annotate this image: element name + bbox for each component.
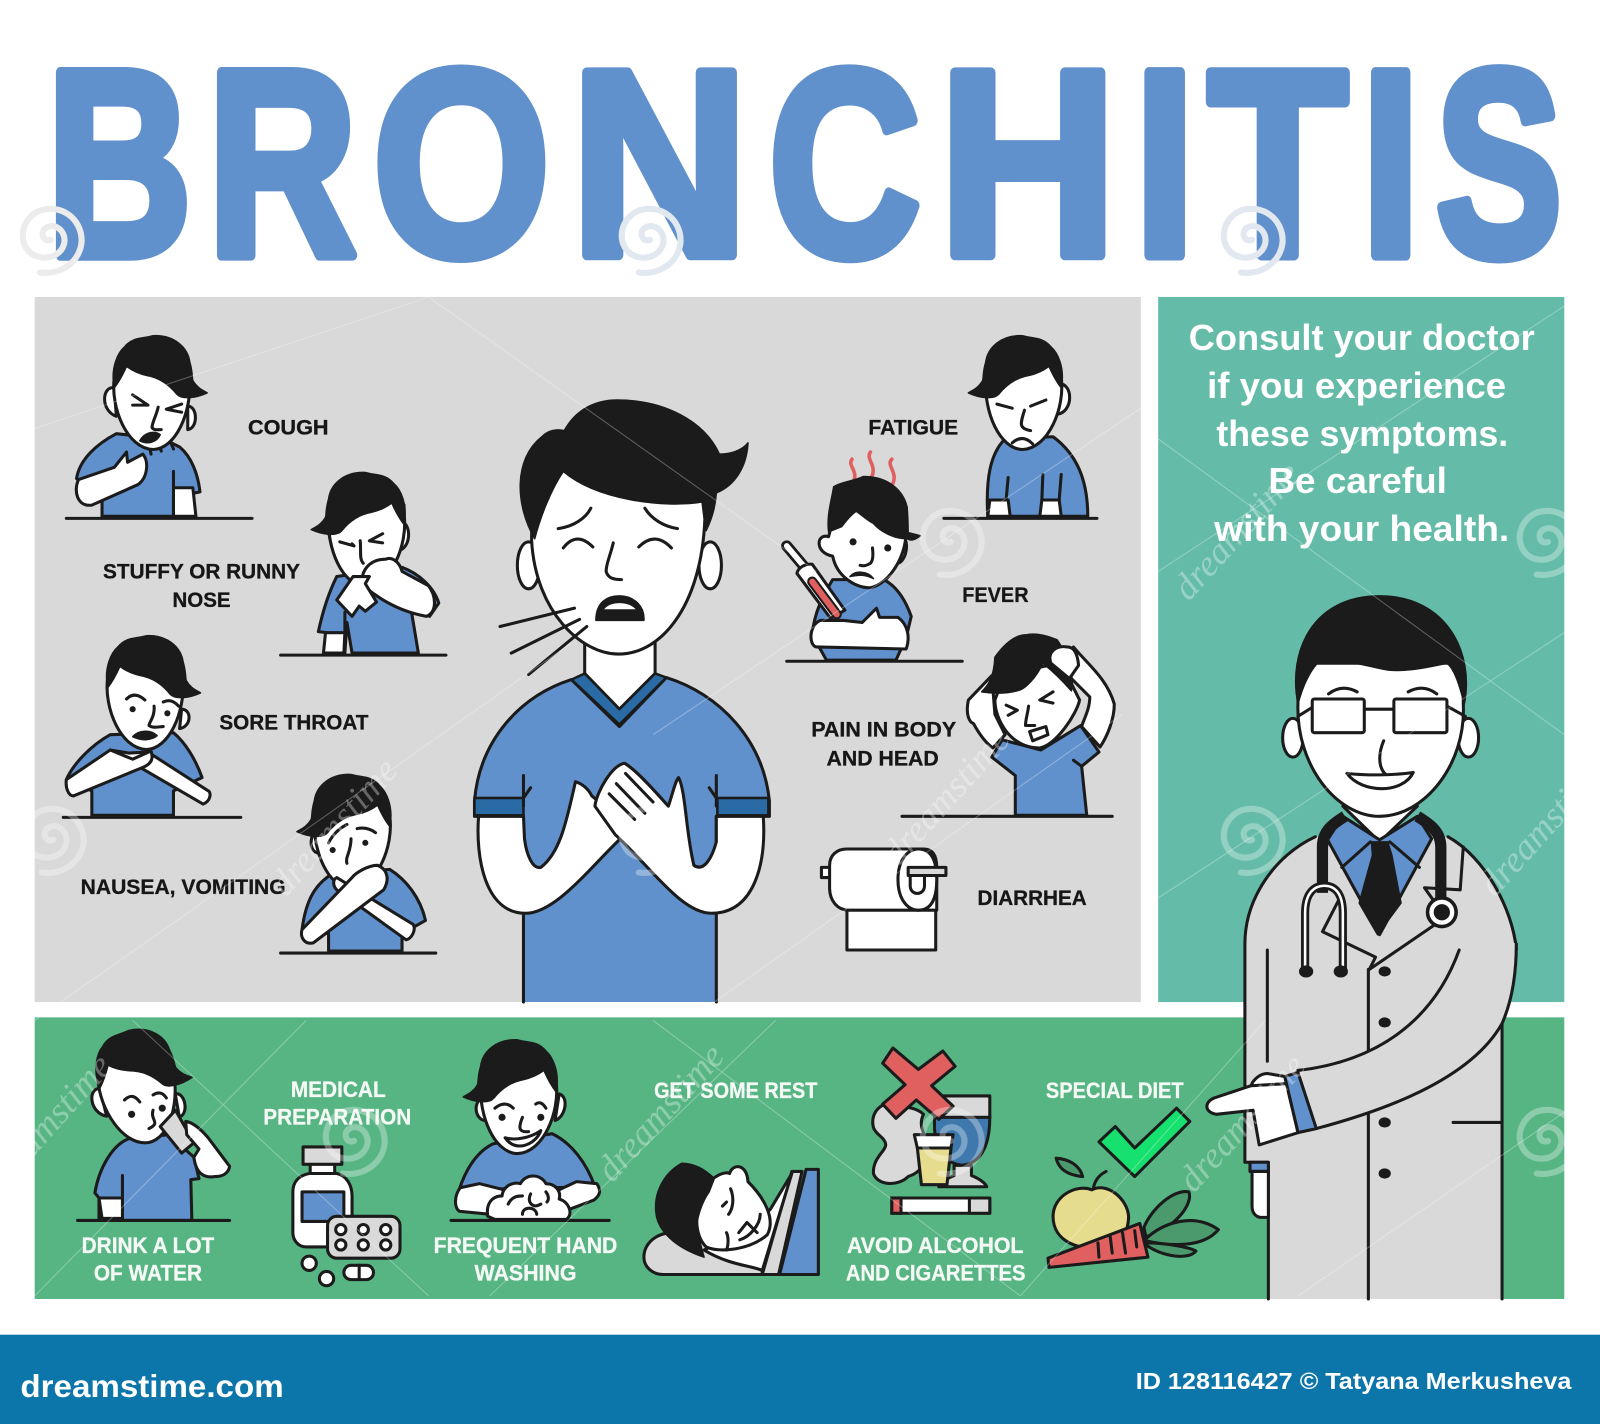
figure: sore throat — [66, 636, 210, 815]
label: avoid alcohol and cigarettes — [846, 1233, 1026, 1286]
title: H — [938, 16, 1117, 312]
title: I — [1134, 15, 1195, 312]
figure: cough — [76, 336, 207, 516]
heading: consult text: these symptoms. — [1216, 414, 1508, 454]
title: R — [207, 17, 357, 312]
title: S — [1436, 14, 1562, 312]
label: drink a lot of water: DRINK A LOT — [82, 1233, 215, 1258]
label: medical preparation: MEDICAL — [291, 1077, 386, 1102]
baseline: pain — [902, 815, 1112, 818]
heading: consult text: with your health. — [1213, 509, 1509, 549]
label: diarrhea: DIARRHEA — [978, 886, 1087, 910]
label: avoid alcohol and cigarettes: AND CIGARETTES — [846, 1261, 1026, 1286]
label: fatigue: FATIGUE — [868, 416, 958, 440]
figure: pain in body and head — [967, 634, 1114, 815]
figure: doctor — [1207, 596, 1516, 1299]
title: B — [47, 15, 192, 311]
baseline: nausea — [281, 952, 436, 955]
label: cough: COUGH — [248, 416, 329, 440]
label: pain in body and head: AND HEAD — [827, 746, 939, 770]
label: pain in body and head: PAIN IN BODY — [811, 718, 956, 742]
label: frequent hand washing: FREQUENT HAND — [434, 1233, 617, 1258]
watermark overlay: dreamstime — [261, 750, 405, 903]
icon: apple and carrot — [1048, 1158, 1218, 1267]
label: frequent hand washing: WASHING — [474, 1261, 577, 1286]
icon: avoid alcohol and cigarettes — [873, 1048, 990, 1213]
label: frequent hand washing — [434, 1233, 617, 1286]
footer bar — [0, 1335, 1600, 1424]
panel: symptoms — [35, 297, 1141, 1002]
figure: drink water — [81, 1021, 230, 1220]
label: nausea, vomiting: NAUSEA, VOMITING — [81, 875, 286, 899]
icon: man sleeping — [644, 1163, 818, 1274]
heading: consult text — [1189, 318, 1535, 549]
figure: fatigue — [968, 336, 1088, 516]
label: sore throat: SORE THROAT — [219, 711, 368, 735]
title: I — [1361, 15, 1420, 311]
baseline: drink — [78, 1219, 230, 1222]
baseline: fever — [787, 660, 962, 663]
label: pain in body and head — [811, 718, 956, 770]
icon: check mark — [1099, 1108, 1190, 1177]
title: C — [769, 15, 921, 312]
figure: fever with thermometer — [787, 452, 920, 660]
baseline: fatigue — [944, 517, 1097, 520]
baseline: stuffy nose — [281, 654, 446, 657]
icon: toilet paper roll — [821, 849, 946, 950]
figure: nausea, vomiting — [297, 774, 426, 951]
heading: consult text: if you experience — [1207, 366, 1506, 406]
label: fever: FEVER — [962, 583, 1029, 607]
figure: stuffy nose — [311, 472, 439, 653]
watermark overlay: dreamstime — [1169, 1045, 1314, 1199]
panel: prevention and treatment — [35, 1017, 1564, 1299]
footer: dreamstime logo: dreamstime.com — [20, 1368, 284, 1404]
watermark overlay: dreamstime — [873, 719, 1018, 873]
label: medical preparation: PREPARATION — [263, 1105, 411, 1130]
label: stuffy or runny nose — [103, 560, 300, 612]
title — [47, 14, 1562, 312]
label: get some rest: GET SOME REST — [654, 1078, 818, 1103]
label: drink a lot of water: OF WATER — [94, 1261, 202, 1286]
label: stuffy or runny nose: STUFFY OR RUNNY — [103, 560, 300, 584]
panel: consult your doctor — [1158, 297, 1564, 1002]
watermark overlay: dreamstime — [588, 1035, 732, 1189]
title: T — [1208, 15, 1348, 312]
baseline: sore throat — [63, 816, 241, 819]
baseline: washing — [451, 1219, 609, 1222]
watermark overlay — [0, 209, 1600, 1296]
heading: consult text: Be careful — [1268, 461, 1447, 501]
label: drink a lot of water — [82, 1233, 215, 1286]
icon: medicine bottle, blister, pills — [293, 1147, 400, 1286]
figure: hand washing — [455, 1040, 600, 1219]
footer: image credit: ID 128116427 © Tatyana Merkusheva — [1136, 1368, 1572, 1394]
label: stuffy or runny nose: NOSE — [172, 588, 231, 612]
title: O — [373, 16, 550, 312]
figure: large coughing man — [474, 400, 769, 1002]
watermark overlay: dreamstime — [1164, 454, 1308, 607]
label: avoid alcohol and cigarettes: AVOID ALCOHOL — [847, 1233, 1024, 1258]
baseline: cough — [66, 517, 252, 520]
heading: consult text: Consult your doctor — [1189, 318, 1535, 358]
label: special diet: SPECIAL DIET — [1046, 1078, 1184, 1103]
title: N — [570, 16, 749, 312]
label: medical preparation — [263, 1077, 411, 1130]
